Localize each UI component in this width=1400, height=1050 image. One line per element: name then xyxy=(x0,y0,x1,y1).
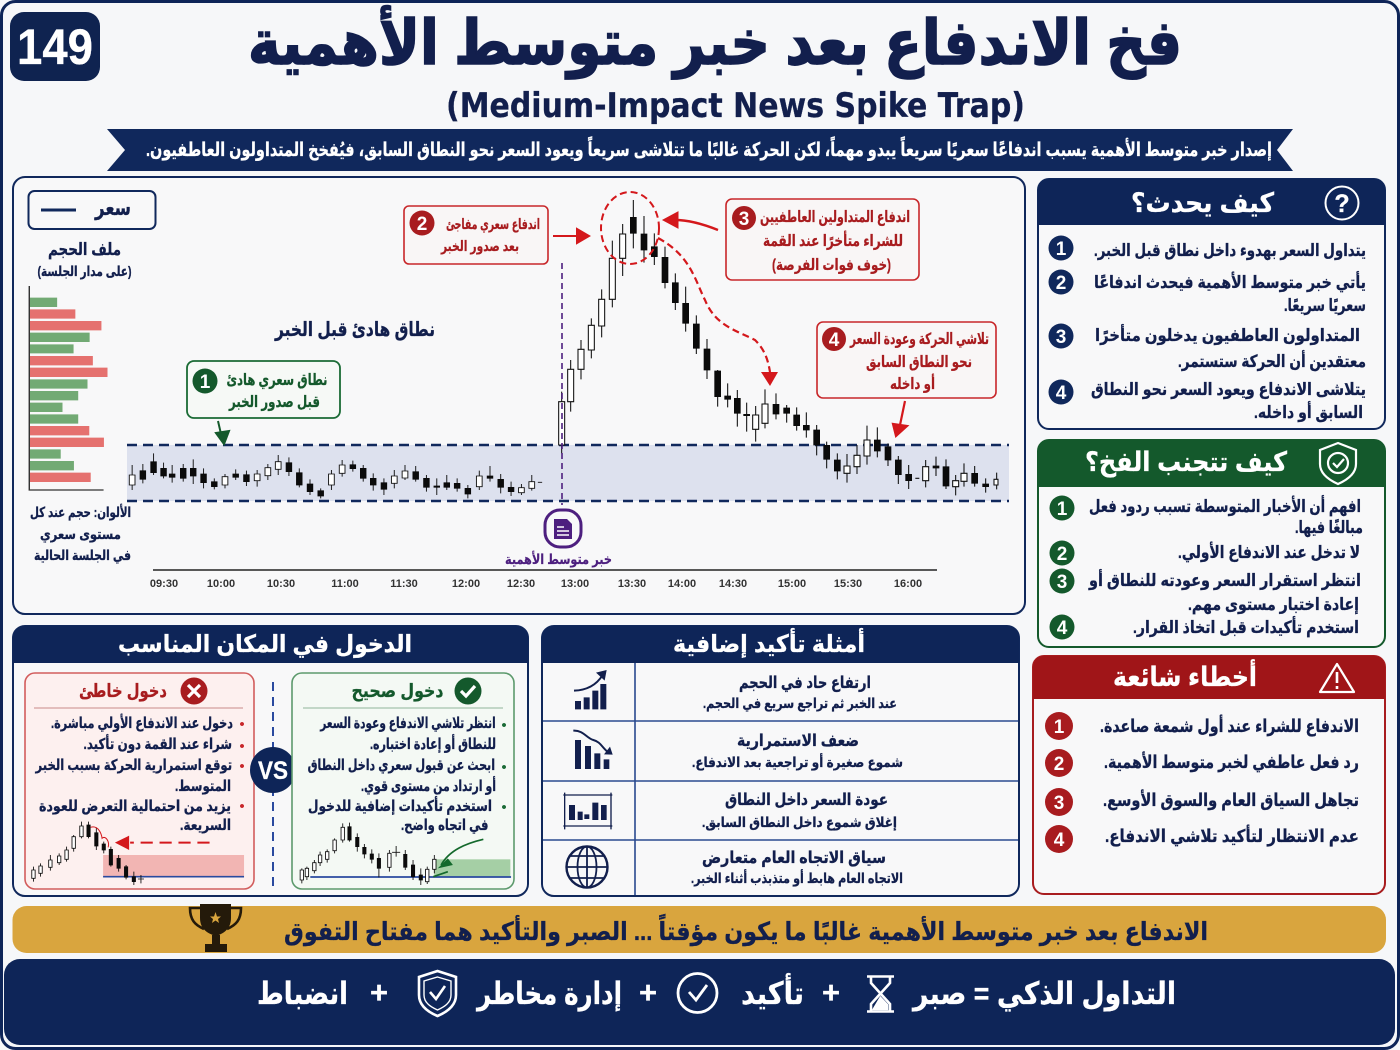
header: confirmations: أمثلة تأكيد إضافية xyxy=(673,628,865,658)
title: فخ الاندفاع بعد خبر متوسط الأهمية xyxy=(248,5,1182,79)
calm range band xyxy=(127,445,1009,501)
time axis: 11:00 xyxy=(331,578,359,590)
icon: hourglass xyxy=(867,976,894,1012)
time axis: 09:30 xyxy=(150,578,178,590)
card: wrong entry xyxy=(25,673,254,889)
banner: summary ribbon xyxy=(107,129,1293,171)
list: correct entry points: في اتجاه واضح. xyxy=(401,817,488,834)
mini chart: correct entry xyxy=(300,823,511,885)
row 4: conflicting trend: سياق الاتجاه العام متعارض xyxy=(702,849,886,867)
icon: cross xyxy=(180,678,208,704)
arrow: dashed fade path xyxy=(658,238,778,386)
callout 4: fade back to range: تلاشي الحركة وعودة السعر xyxy=(849,331,989,349)
steps: avoid the trap xyxy=(1050,495,1363,640)
callout 3: late emotional buyers: (خوف فوات الفرصة) xyxy=(772,257,891,274)
news event marker line xyxy=(561,263,563,505)
steps: how it happens: المتداولون العاطفيون يدخلون متأخرًا xyxy=(1095,324,1360,346)
footer formula: + xyxy=(370,975,388,1010)
time axis: 14:00 xyxy=(668,578,696,590)
row 2: weak continuation xyxy=(692,732,903,771)
steps: avoid the trap: 3 xyxy=(1057,572,1067,593)
time axis: 15:30 xyxy=(834,578,862,590)
card: correct entry: دخول صحيح xyxy=(352,680,444,702)
icon: shield xyxy=(419,971,456,1016)
row 4: conflicting trend xyxy=(691,849,903,887)
time axis: 13:30 xyxy=(618,578,646,590)
footer formula: إدارة مخاطر xyxy=(475,976,622,1012)
card: wrong entry: دخول خاطئ xyxy=(79,680,167,702)
callout 1: calm range: قبل صدور الخبر xyxy=(228,394,320,411)
header: how it happens: كيف يحدث؟ xyxy=(1131,188,1274,218)
footer formula: + xyxy=(639,975,657,1010)
callout 3: late emotional buyers: اندفاع المتداولين العاطفيين xyxy=(760,209,910,226)
icon: shield check xyxy=(1320,443,1356,484)
callout 1: calm range: نطاق سعري هادئ xyxy=(226,372,328,390)
steps: avoid the trap: انتظر استقرار السعر وعودته للنطاق أو xyxy=(1088,569,1361,591)
panel: how to avoid the trap xyxy=(1038,440,1385,647)
panel: confirmation examples xyxy=(542,626,1019,896)
icon: check xyxy=(454,678,482,704)
panel: price chart xyxy=(13,177,1025,614)
callout 1: calm range: 1 xyxy=(200,372,211,393)
steps: mistakes: 3 xyxy=(1054,793,1064,814)
list: correct entry points: انتظر تلاشي الاندفاع وعودة السعر xyxy=(320,715,496,732)
callout 4: fade back to range: نحو النطاق السابق xyxy=(866,354,972,371)
steps: how it happens: السابق أو داخله. xyxy=(1254,401,1363,423)
list: correct entry points: استخدم تأكيدات إضافية للدخول xyxy=(308,796,492,815)
header: avoid the trap: كيف تتجنب الفخ؟ xyxy=(1085,447,1287,478)
callout 4: fade back to range: 4 xyxy=(829,330,840,351)
panel: how it happens xyxy=(1038,179,1385,429)
row 3: return inside range: عودة السعر داخل النطاق xyxy=(725,791,888,810)
list: correct entry points: أو ارتداد من مستوى قوي. xyxy=(361,776,496,796)
header: entry xyxy=(13,626,528,663)
icon: falling bars xyxy=(573,731,613,769)
steps: avoid the trap: 1 xyxy=(1057,499,1068,520)
volume colour note xyxy=(30,504,131,564)
volume profile bars xyxy=(29,286,107,490)
steps: avoid the trap: استخدم تأكيدات قبل اتخاذ القرار. xyxy=(1133,616,1359,638)
header: avoid the trap xyxy=(1038,440,1385,487)
icon: range candles xyxy=(563,793,612,829)
highlight: peak dashed circle xyxy=(601,192,659,264)
volume colour note: الألوان: حجم عند كل xyxy=(30,504,131,521)
gold takeaway band: الاندفاع بعد خبر متوسط الأهمية غالبًا ما يكون مؤقتاً ... الصبر والتأكيد هما مفتاح التفوق xyxy=(284,914,1208,947)
header: how it happens xyxy=(1038,179,1385,225)
volume colour note: في الجلسة الحالية xyxy=(34,547,131,564)
time axis: 16:00 xyxy=(894,578,922,590)
callout 3: late emotional buyers xyxy=(726,199,919,280)
row 1: volume spike: عند الخبر ثم تراجع سريع في الحجم. xyxy=(703,695,897,712)
time axis: 11:30 xyxy=(390,578,418,590)
steps: mistakes: 4 xyxy=(1054,830,1065,851)
header: mistakes xyxy=(1033,656,1385,699)
icon: question: ? xyxy=(1334,190,1350,218)
row 1: volume spike: ارتفاع حاد في الحجم xyxy=(739,674,871,693)
steps: avoid the trap: لا تدخل عند الاندفاع الأولي. xyxy=(1178,542,1360,563)
label: calm range: نطاق هادئ قبل الخبر xyxy=(274,319,435,341)
time axis: 12:00 xyxy=(452,578,480,590)
callout 1: calm range xyxy=(187,361,340,418)
row 1: volume spike xyxy=(703,674,897,712)
arrow: to spike xyxy=(553,229,589,243)
volume profile heading: ملف الحجم xyxy=(48,240,121,259)
row 2: weak continuation: ضعف الاستمرارية xyxy=(737,732,859,751)
row 4: conflicting trend: الاتجاه العام هابط أو متذبذب أثناء الخبر. xyxy=(691,869,903,887)
row 3: return inside range: إغلاق شموع داخل النطاق السابق. xyxy=(702,814,897,831)
header: mistakes: أخطاء شائعة xyxy=(1113,659,1257,692)
list: wrong entry points: المتوسط. xyxy=(175,778,231,795)
callout 4: fade back to range: أو داخله xyxy=(890,374,935,393)
divider: versus xyxy=(250,682,296,889)
time axis: 12:30 xyxy=(507,578,535,590)
steps: avoid the trap: 2 xyxy=(1057,544,1067,565)
steps: how it happens: 2 xyxy=(1056,273,1066,294)
panel: common mistakes xyxy=(1033,656,1385,894)
steps: avoid the trap: 4 xyxy=(1057,618,1068,639)
callout 2: sudden spike: بعد صدور الخبر xyxy=(440,239,519,255)
callout 4: fade back to range xyxy=(817,322,996,398)
steps: mistakes: 1 xyxy=(1054,717,1065,738)
time axis: 14:30 xyxy=(719,578,747,590)
list: correct entry points: للنطاق أو إعادة اختباره. xyxy=(370,734,496,753)
news label: خبر متوسط الأهمية xyxy=(505,551,612,568)
steps: mistakes: عدم الانتظار لتأكيد تلاشي الاندفاع. xyxy=(1105,825,1359,847)
callout 3: late emotional buyers: للشراء متأخرًا عند القمة xyxy=(763,231,903,250)
footer formula: التداول الذكي = صبر xyxy=(911,976,1176,1012)
mini chart: wrong entry xyxy=(32,822,244,885)
volume profile heading: (على مدار الجلسة) xyxy=(38,263,132,279)
footer formula: انضباط xyxy=(257,976,348,1011)
time axis: 15:00 xyxy=(778,578,806,590)
footer formula: + xyxy=(822,975,840,1010)
callout 2: sudden spike: اندفاع سعري مفاجئ xyxy=(446,217,540,234)
steps: how it happens: 3 xyxy=(1056,327,1066,348)
callout 3: late emotional buyers: 3 xyxy=(739,209,749,230)
row 2: weak continuation: شموع صغيرة أو تراجعية بعد الاندفاع. xyxy=(692,753,903,771)
candlesticks: spike and fade xyxy=(559,200,998,495)
callout 2: sudden spike xyxy=(404,206,548,264)
gold takeaway band xyxy=(12,906,1386,953)
panel: right place entry xyxy=(13,626,528,896)
badge: number 149: 149 xyxy=(17,19,93,75)
callout 2: sudden spike: 2 xyxy=(417,214,427,235)
header: confirmations xyxy=(542,626,1019,663)
icon: rising bars xyxy=(574,670,607,709)
steps: how it happens: سعريًا سريعًا. xyxy=(1284,296,1366,316)
icon: trophy xyxy=(190,904,241,952)
icon: question xyxy=(1326,186,1358,220)
list: wrong entry points: شراء عند القمة دون تأكيد. xyxy=(84,734,232,753)
arrow: to peak xyxy=(663,212,718,230)
header: entry: الدخول في المكان المناسب xyxy=(118,631,412,658)
legend: price xyxy=(28,191,156,229)
row 3: return inside range xyxy=(702,791,897,831)
steps: how it happens: 4 xyxy=(1056,383,1067,404)
list: correct entry points: ابحث عن قبول سعري داخل النطاق xyxy=(308,757,495,775)
time axis: 13:00 xyxy=(561,578,589,590)
steps: how it happens xyxy=(1048,236,1366,423)
legend: price: سعر xyxy=(94,197,131,220)
volume profile heading xyxy=(38,240,132,279)
list: wrong entry points xyxy=(35,714,244,834)
footer formula xyxy=(4,959,1395,1045)
list: correct entry points xyxy=(308,715,506,834)
list: wrong entry points: يزيد من احتمالية التعرض للعودة xyxy=(39,798,231,815)
footer formula: تأكيد xyxy=(741,973,804,1011)
steps: how it happens: 1 xyxy=(1056,239,1067,260)
list: wrong entry points: دخول عند الاندفاع الأولي مباشرة. xyxy=(51,714,233,732)
subtitle: (Medium-Impact News Spike Trap) xyxy=(446,86,1025,126)
candlesticks: calm range before news xyxy=(129,453,542,498)
icon: globe xyxy=(566,846,608,888)
card: correct entry xyxy=(292,673,514,889)
arrow: to calm range xyxy=(216,421,229,444)
time axis xyxy=(150,570,937,590)
arrow: to range xyxy=(893,401,907,436)
time axis: 10:30 xyxy=(267,578,295,590)
divider: versus: VS xyxy=(258,757,288,785)
volume colour note: مستوى سعري xyxy=(40,526,121,544)
list: wrong entry points: توقع استمرارية الحركة بسبب الخبر xyxy=(35,757,232,774)
icon: warning triangle xyxy=(1320,664,1354,692)
steps: avoid the trap: مبالغًا فيها. xyxy=(1295,518,1363,538)
icon: check circle xyxy=(678,974,717,1012)
list: wrong entry points: السريعة. xyxy=(180,817,231,834)
time axis: 10:00 xyxy=(207,578,235,590)
steps: mistakes xyxy=(1045,712,1359,853)
steps: mistakes: 2 xyxy=(1054,754,1064,775)
icon: news document xyxy=(545,510,581,547)
steps: avoid the trap: إعادة اختبار مستوى مهم. xyxy=(1188,595,1359,615)
